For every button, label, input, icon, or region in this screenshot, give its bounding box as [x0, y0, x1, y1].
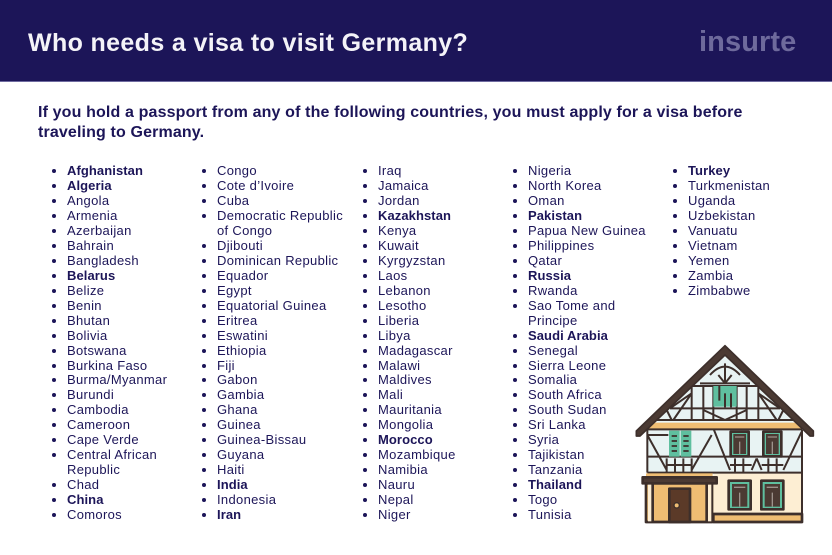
- country list column 2: Djibouti: [217, 238, 263, 253]
- country list column 4: Qatar: [528, 253, 562, 268]
- country list column 4: Pakistan: [528, 208, 582, 223]
- country list column 5: Vanuatu: [688, 223, 738, 238]
- country list column 2: Congo: [217, 163, 257, 178]
- country list column 1: [52, 163, 167, 522]
- country list column 2: Cote d’Ivoire: [217, 178, 294, 193]
- header banner: [0, 0, 832, 82]
- country list column 5: Yemen: [688, 253, 730, 268]
- country list column 4: Tunisia: [528, 507, 572, 522]
- country list column 1: Burma/Myanmar: [67, 372, 167, 387]
- country list column 4: South Africa: [528, 387, 602, 402]
- country list column 3: Kenya: [378, 223, 416, 238]
- country list column 3: Madagascar: [378, 343, 453, 358]
- country list column 2: India: [217, 477, 248, 492]
- country list column 1: Bolivia: [67, 328, 108, 343]
- country list column 5: Zimbabwe: [688, 283, 751, 298]
- gable wall: [648, 353, 802, 430]
- country list column 4: Nigeria: [528, 163, 571, 178]
- country list column 1: Belize: [67, 283, 104, 298]
- country list column 2: Dominican Republic: [217, 253, 338, 268]
- country list column 4: Rwanda: [528, 283, 578, 298]
- country list column 3: Kyrgyzstan: [378, 253, 446, 268]
- ground floor window right: [761, 481, 783, 509]
- country list column 5: Zambia: [688, 268, 733, 283]
- country list column 3: Maldives: [378, 372, 432, 387]
- country list column 1: Burkina Faso: [67, 358, 147, 373]
- country list column 4: [513, 163, 646, 522]
- country list column 3: Niger: [378, 507, 411, 522]
- country list column 1: Republic: [67, 462, 120, 477]
- country list column 2: Ghana: [217, 402, 258, 417]
- first floor window left: [731, 432, 749, 456]
- country list column 3: Nepal: [378, 492, 414, 507]
- country list column 3: Mozambique: [378, 447, 456, 462]
- country list column 1: Cambodia: [67, 402, 129, 417]
- country list column 1: Burundi: [67, 387, 114, 402]
- door: [669, 489, 690, 522]
- country list column 4: Oman: [528, 193, 565, 208]
- country list column 2: Egypt: [217, 283, 252, 298]
- roof: [636, 346, 813, 436]
- country list column 4: Principe: [528, 313, 578, 328]
- ground floor window left: [729, 481, 751, 509]
- country list column 3: Namibia: [378, 462, 428, 477]
- country list column 3: Jamaica: [378, 178, 429, 193]
- country list column 4: Tajikistan: [528, 447, 585, 462]
- country list column 3: Mauritania: [378, 402, 442, 417]
- country list column 3: Malawi: [378, 358, 420, 373]
- country list column 3: Mali: [378, 387, 403, 402]
- country list column 4: Papua New Guinea: [528, 223, 646, 238]
- intro text: traveling to Germany.: [38, 124, 204, 141]
- country list column 1: Cape Verde: [67, 432, 139, 447]
- porch: [643, 473, 717, 522]
- country list column 2: [202, 163, 343, 522]
- country list column 4: Saudi Arabia: [528, 328, 608, 343]
- country list column 3: Lebanon: [378, 283, 431, 298]
- country list column 4: North Korea: [528, 178, 602, 193]
- intro text: If you hold a passport from any of the following countries, you must apply for a visa before: [38, 104, 743, 121]
- country list column 4: Senegal: [528, 343, 578, 358]
- country list column 2: Guinea: [217, 417, 261, 432]
- country list column 1: Belarus: [67, 268, 115, 283]
- country list column 4: Sao Tome and: [528, 298, 615, 313]
- country list column 3: Libya: [378, 328, 411, 343]
- country list column 2: Eritrea: [217, 313, 258, 328]
- country list column 2: Haiti: [217, 462, 245, 477]
- country list column 3: Morocco: [378, 432, 433, 447]
- country list column 2: Cuba: [217, 193, 249, 208]
- country list column 1: Afghanistan: [67, 163, 143, 178]
- country list column 5: Vietnam: [688, 238, 738, 253]
- country list column 1: Central African: [67, 447, 157, 462]
- country list column 4: Thailand: [528, 477, 582, 492]
- country list column 4: Sierra Leone: [528, 358, 606, 373]
- country list column 1: China: [67, 492, 104, 507]
- country list column 2: Equador: [217, 268, 268, 283]
- country list column 5: Uganda: [688, 193, 735, 208]
- roof beam: [648, 423, 802, 429]
- country list column 2: Fiji: [217, 358, 235, 373]
- country list column 2: Ethiopia: [217, 343, 267, 358]
- attic window: [713, 386, 737, 407]
- gable timbers: [657, 363, 793, 420]
- country list column 2: Gabon: [217, 372, 258, 387]
- country list column 2: Guyana: [217, 447, 264, 462]
- logo: insurte: [699, 26, 796, 58]
- country list column 3: Kuwait: [378, 238, 419, 253]
- green shutters: [669, 431, 691, 457]
- country list column 5: Turkey: [688, 163, 730, 178]
- country list column 4: Russia: [528, 268, 571, 283]
- title: Who needs a visa to visit Germany?: [28, 29, 468, 57]
- country list column 5: Uzbekistan: [688, 208, 756, 223]
- first floor timbers: [647, 429, 802, 522]
- ground floor wall: [713, 473, 802, 522]
- country list column 3: Lesotho: [378, 298, 427, 313]
- country list column 2: Guinea-Bissau: [217, 432, 306, 447]
- country list column 1: Azerbaijan: [67, 223, 132, 238]
- country list column 2: Iran: [217, 507, 241, 522]
- country list column 2: Democratic Republic: [217, 208, 343, 223]
- country list column 4: Philippines: [528, 238, 594, 253]
- country list column 1: Benin: [67, 298, 102, 313]
- country list column 4: Syria: [528, 432, 559, 447]
- country list column 1: Bhutan: [67, 313, 110, 328]
- country list column 2: Indonesia: [217, 492, 276, 507]
- country list column 1: Cameroon: [67, 417, 130, 432]
- country list column 2: Eswatini: [217, 328, 268, 343]
- country list column 1: Angola: [67, 193, 109, 208]
- country list column 5: [673, 163, 770, 298]
- country list column 1: Bangladesh: [67, 253, 139, 268]
- country list column 1: Comoros: [67, 507, 122, 522]
- country list column 3: Liberia: [378, 313, 419, 328]
- country list column 3: Laos: [378, 268, 407, 283]
- first floor window right: [763, 432, 781, 456]
- country list column 2: Gambia: [217, 387, 264, 402]
- country list column 3: Nauru: [378, 477, 415, 492]
- illustration: half-timbered house: [636, 344, 814, 524]
- country list column 1: Algeria: [67, 178, 112, 193]
- country list column 3: Iraq: [378, 163, 402, 178]
- country list column 5: Turkmenistan: [688, 178, 770, 193]
- country list column 4: Tanzania: [528, 462, 583, 477]
- intro text: [38, 104, 743, 141]
- country list column 4: Somalia: [528, 372, 577, 387]
- country list column 3: [363, 163, 456, 522]
- country list column 1: Armenia: [67, 208, 118, 223]
- country list column 4: South Sudan: [528, 402, 607, 417]
- country list column 3: Jordan: [378, 193, 420, 208]
- country list column 2: of Congo: [217, 223, 272, 238]
- country list column 3: Kazakhstan: [378, 208, 451, 223]
- country list column 1: Bahrain: [67, 238, 114, 253]
- country list column 1: Botswana: [67, 343, 127, 358]
- base plinth: [713, 514, 802, 522]
- country list column 1: Chad: [67, 477, 99, 492]
- country list column 4: Sri Lanka: [528, 417, 586, 432]
- country list column 2: Equatorial Guinea: [217, 298, 327, 313]
- country list column 4: Togo: [528, 492, 557, 507]
- country list column 3: Mongolia: [378, 417, 433, 432]
